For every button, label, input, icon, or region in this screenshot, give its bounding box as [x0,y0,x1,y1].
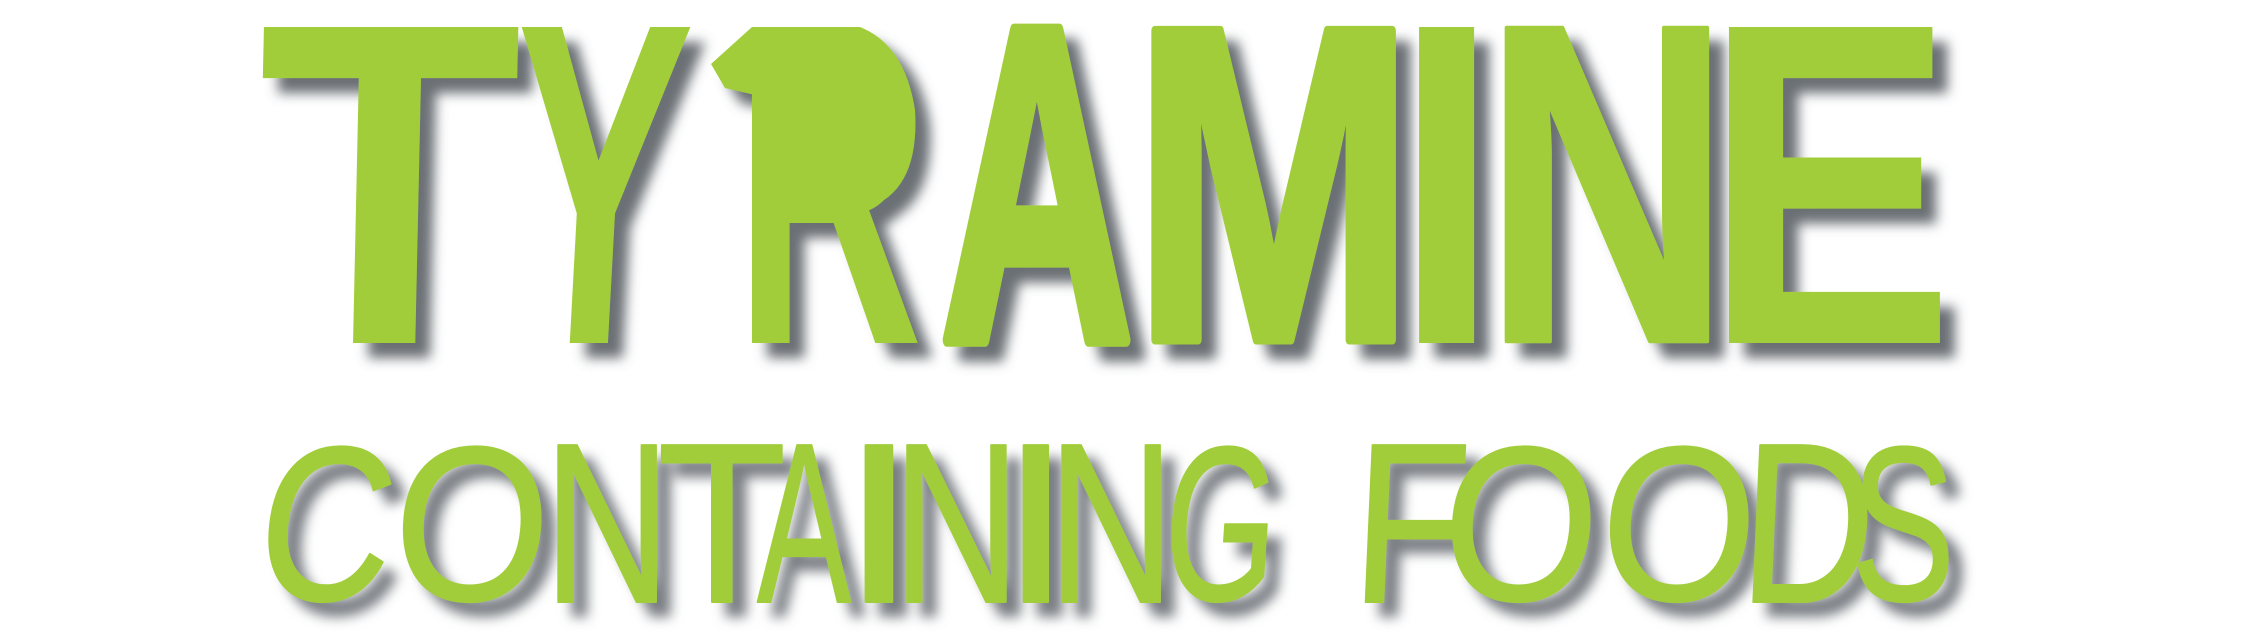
subheading: CONTAINING FOODS: O [1438,401,1605,644]
subheading: CONTAINING FOODS: T [657,396,787,644]
subheading: CONTAINING FOODS: I [1000,396,1072,644]
subheading: CONTAINING FOODS: N [544,397,670,644]
subheading: CONTAINING FOODS: G [1157,401,1286,644]
heading: TYRAMINE [250,0,1955,441]
subheading: CONTAINING FOODS: F [1348,397,1475,644]
subheading: CONTAINING FOODS: N [892,396,1020,644]
subheading: CONTAINING FOODS: D [1736,397,1881,644]
subheading: CONTAINING FOODS [247,396,1955,644]
subheading: CONTAINING FOODS: I [840,397,918,644]
subheading: CONTAINING FOODS: A [757,396,851,644]
subheading: CONTAINING FOODS: S [1851,402,1955,644]
subheading: CONTAINING FOODS: O [1596,401,1763,644]
subheading: CONTAINING FOODS: N [1048,397,1174,644]
subheading: CONTAINING FOODS: O [389,401,556,644]
subheading: CONTAINING FOODS: C [247,402,408,644]
